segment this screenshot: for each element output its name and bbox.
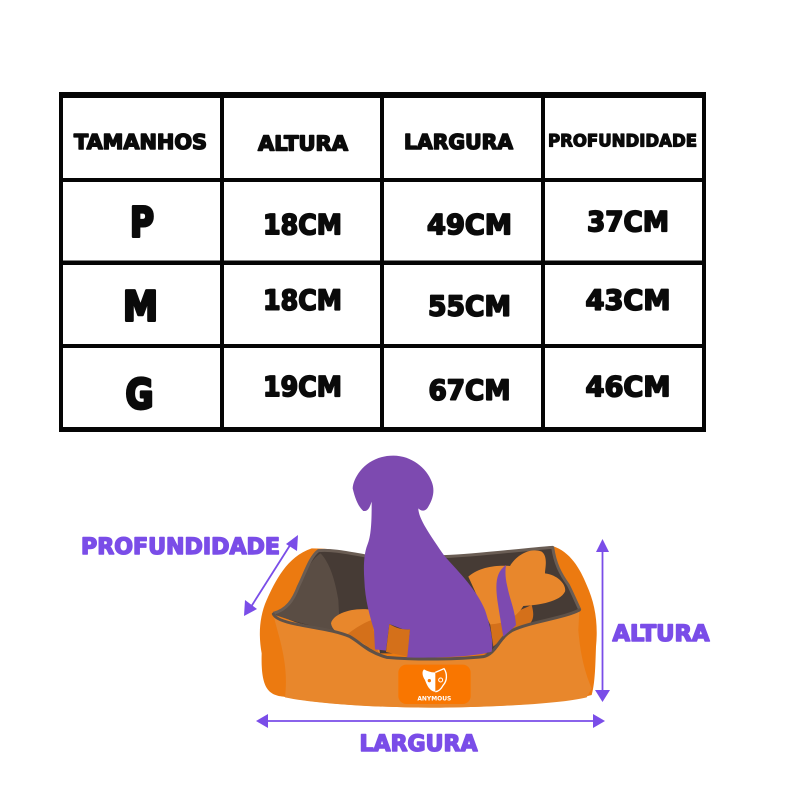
- row M: [123, 282, 670, 330]
- arrow: depth: [244, 535, 298, 616]
- bone toy: [468, 550, 565, 624]
- row G: G: [126, 370, 154, 418]
- table header row: LARGURA: [404, 130, 514, 154]
- table header row: ALTURA: [258, 132, 349, 156]
- table header row: TAMANHOS: [74, 130, 207, 154]
- row M: 18CM: [263, 284, 342, 316]
- table grid: [59, 92, 706, 432]
- arrow: width: [256, 714, 605, 728]
- row M: 55CM: [428, 290, 511, 322]
- cushion left: [331, 609, 380, 653]
- bed inner dark: [273, 547, 580, 653]
- bed front rim: [273, 610, 579, 659]
- illustration: dog in orange bed: [260, 456, 597, 708]
- row G: [126, 370, 670, 418]
- label: PROFUNDIDADE: PROFUNDIDADE: [81, 535, 280, 560]
- row G: 19CM: [263, 370, 342, 403]
- row G: 67CM: [428, 374, 510, 406]
- logo badge: [398, 665, 471, 704]
- label: ALTURA: ALTURA: [612, 622, 710, 647]
- row P: [130, 198, 669, 246]
- row M: M: [123, 282, 158, 330]
- cushion right: [490, 605, 533, 647]
- label: LARGURA: LARGURA: [360, 732, 478, 757]
- bed outer shell: [260, 546, 597, 708]
- bed front: [273, 611, 592, 708]
- table header row: [74, 130, 697, 156]
- bed inner left wall: [275, 553, 340, 633]
- size table: [59, 92, 706, 432]
- row P: 18CM: [263, 208, 342, 241]
- dog silhouette: [353, 456, 492, 658]
- bed rim top: [273, 547, 580, 613]
- row P: 49CM: [427, 208, 512, 241]
- row P: 37CM: [587, 205, 669, 238]
- dog tail: [496, 565, 516, 637]
- dog hind leg gap: [386, 624, 410, 657]
- table header row: PROFUNDIDADE: [548, 131, 697, 151]
- cushion left shade: [347, 620, 378, 653]
- arrow: height: [595, 539, 610, 702]
- row M: 43CM: [586, 284, 670, 316]
- logo wordmark: ANYMOUS: [417, 695, 452, 702]
- logo dog head: [423, 669, 446, 692]
- row P: P: [130, 198, 154, 246]
- row G: 46CM: [586, 370, 670, 403]
